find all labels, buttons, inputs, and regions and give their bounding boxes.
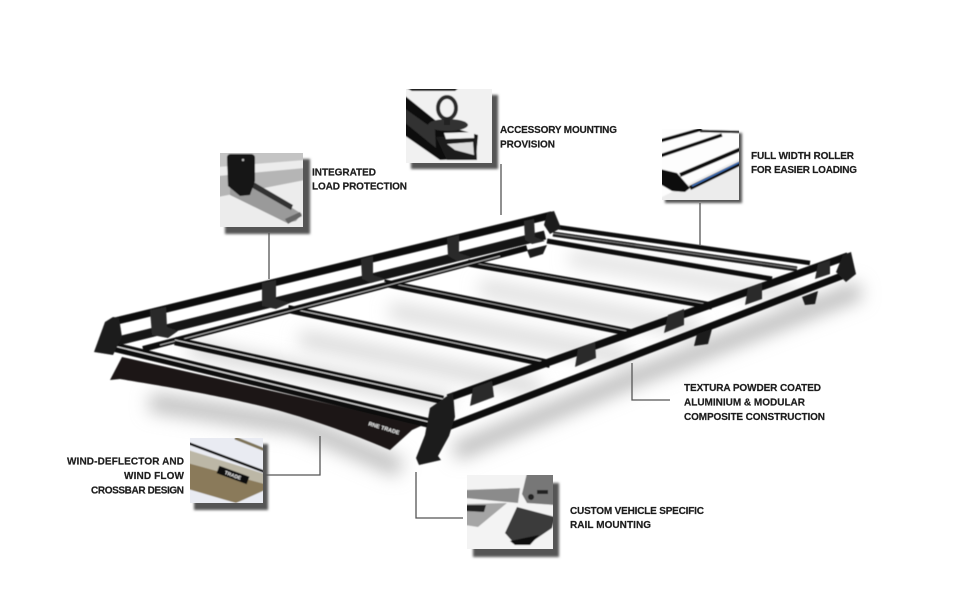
right rail brackets: [470, 260, 830, 406]
label: wind deflector: WIND-DEFLECTOR AND: [67, 456, 184, 468]
wind deflector: [110, 357, 423, 450]
photo: load protection: [218, 151, 310, 234]
rail feet: [527, 245, 818, 346]
label: rail mounting: [570, 506, 704, 531]
inner left rail: [143, 248, 527, 349]
deflector logo: RNE TRADE: [367, 421, 400, 437]
left rail brackets: [150, 219, 545, 338]
connector: wind deflector: [265, 436, 320, 475]
label: wind deflector: [67, 456, 185, 496]
label: wind deflector: CROSSBAR DESIGN: [91, 486, 184, 496]
label: roller: [751, 151, 857, 176]
roof rack: [94, 211, 856, 465]
crossbars: [288, 262, 712, 364]
label: roller: FULL WIDTH ROLLER: [751, 151, 855, 162]
connector: roller: [699, 203, 701, 245]
photo: wind deflector: [188, 436, 268, 510]
label: load protection: [312, 168, 407, 192]
front roller bars: [110, 340, 443, 424]
connector: load protection: [268, 233, 270, 279]
photo: wind deflector: TRADE: [224, 470, 242, 482]
rear roller bars: [547, 227, 810, 279]
connector: accessory mounting: [500, 164, 502, 215]
label: textura: TEXTURA POWDER COATED: [684, 383, 821, 394]
photo: roller: [660, 127, 742, 203]
connector: rail mounting: [416, 472, 463, 518]
photo: rail mounting: [465, 473, 559, 557]
right rails: [440, 256, 852, 430]
label: textura: COMPOSITE CONSTRUCTION: [684, 412, 825, 423]
infographic: [66, 89, 869, 559]
label: rail mounting: RAIL MOUNTING: [570, 520, 651, 531]
end brackets: [94, 211, 856, 465]
connector: textura: [632, 363, 670, 400]
label: textura: ALUMINIUM & MODULAR: [684, 398, 806, 408]
photo: eye bolt: [404, 87, 498, 169]
label: load protection: INTEGRATED: [312, 168, 376, 178]
label: textura: [684, 383, 825, 423]
rack shadow: [150, 257, 860, 468]
label: roller: FOR EASIER LOADING: [751, 165, 857, 176]
label: wind deflector: WIND FLOW: [124, 471, 185, 482]
label: accessory mounting: [500, 125, 617, 150]
label: load protection: LOAD PROTECTION: [312, 182, 407, 192]
left rails: [112, 215, 552, 341]
label: accessory mounting: ACCESSORY MOUNTING: [500, 125, 617, 136]
label: accessory mounting: PROVISION: [500, 140, 555, 150]
label: rail mounting: CUSTOM VEHICLE SPECIFIC: [570, 506, 704, 517]
